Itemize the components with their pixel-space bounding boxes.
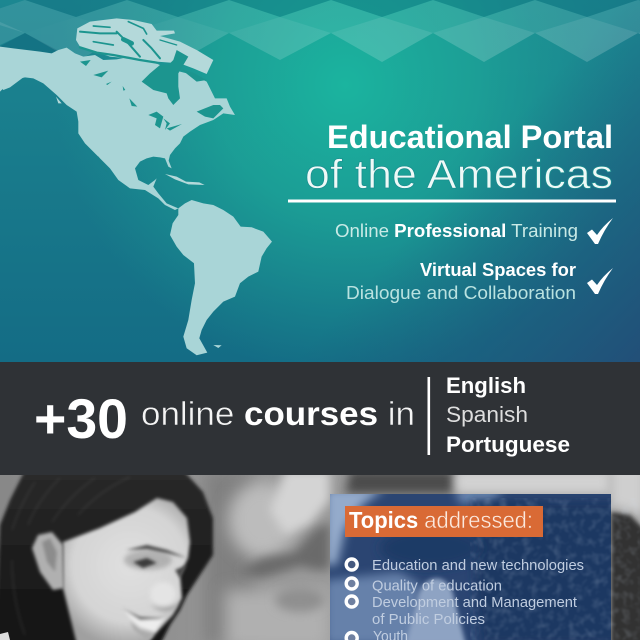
upper diamonds bbox=[0, 0, 640, 33]
Hudson Bay, lakes and inlets bbox=[80, 50, 223, 173]
title underline bbox=[288, 200, 616, 202]
dark top triangles bbox=[25, 0, 638, 17]
title: of the Americas bbox=[305, 151, 613, 197]
languages list bbox=[446, 373, 570, 457]
bullet icon bbox=[346, 596, 357, 607]
icon: check mark bbox=[587, 268, 613, 294]
languages list: Portuguese bbox=[446, 432, 570, 457]
ear bbox=[32, 532, 64, 590]
eyebrow and eye bbox=[126, 545, 187, 578]
languages list: Spanish bbox=[446, 402, 528, 427]
Caribbean islands bbox=[56, 97, 205, 185]
Arctic islands bbox=[76, 18, 213, 74]
bullet icon bbox=[346, 632, 357, 640]
eye socket shadow bbox=[124, 550, 172, 570]
feature: virtual spaces: Dialogue and Collaboration bbox=[346, 282, 576, 303]
bullet icon bbox=[346, 559, 357, 570]
photo: smiling woman bbox=[0, 465, 640, 640]
title bbox=[305, 119, 613, 197]
Arctic channels bbox=[80, 22, 177, 63]
topics list: Education and new technologies bbox=[372, 558, 584, 574]
hero background bbox=[0, 0, 640, 362]
lower diamonds bbox=[0, 17, 640, 62]
band divider bbox=[428, 377, 430, 455]
title: Educational Portal bbox=[327, 119, 613, 155]
feature: online professional training: Online Professional Training bbox=[335, 220, 578, 241]
topics list: Development and Management bbox=[372, 595, 577, 611]
foliage texture bbox=[470, 498, 640, 640]
courses headline bbox=[34, 387, 415, 450]
panel image tint bbox=[325, 488, 620, 640]
topics list: of Public Policies bbox=[372, 612, 485, 628]
feature: virtual spaces: Virtual Spaces for bbox=[420, 259, 576, 280]
North America bbox=[0, 47, 235, 210]
topics list bbox=[346, 558, 584, 640]
hair highlights bbox=[12, 477, 130, 635]
bullet icon bbox=[346, 578, 357, 589]
diamond pattern bbox=[0, 0, 640, 62]
icon: check mark bbox=[587, 218, 613, 244]
South America bbox=[170, 200, 272, 355]
left dark wedge bbox=[0, 33, 76, 60]
languages list: English bbox=[446, 373, 526, 398]
dark band bbox=[0, 362, 640, 475]
nose bbox=[150, 582, 180, 611]
panel: topics bbox=[325, 488, 640, 640]
hair bbox=[0, 470, 213, 640]
shoulder bbox=[0, 632, 10, 640]
courses headline: +30 bbox=[34, 387, 128, 450]
face bbox=[63, 498, 190, 640]
courses headline: online courses in bbox=[141, 395, 415, 432]
heading: topics addressed: Topics addressed: bbox=[349, 507, 533, 533]
map of the Americas bbox=[0, 18, 272, 355]
feature: virtual spaces bbox=[346, 259, 613, 303]
mouth bbox=[126, 609, 165, 638]
Falkland islands bbox=[213, 345, 222, 348]
blurred background bbox=[205, 465, 640, 640]
topics list: Quality of education bbox=[372, 578, 502, 594]
